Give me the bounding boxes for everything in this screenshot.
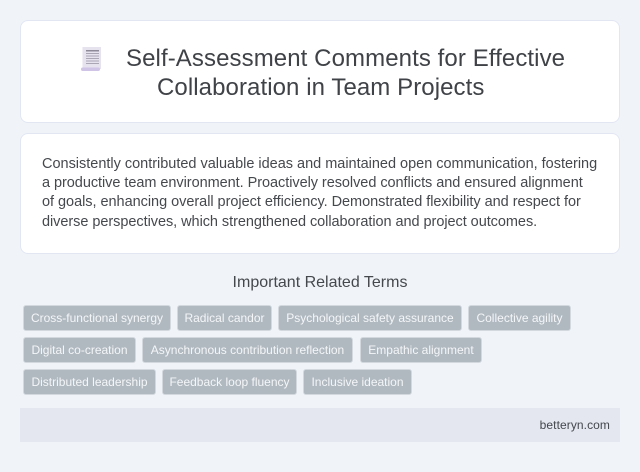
summary text bbox=[42, 156, 597, 230]
tag: Empathic alignment bbox=[368, 343, 474, 357]
footer source: betteryn.com bbox=[540, 418, 610, 432]
footer bar bbox=[20, 408, 620, 442]
tag list bbox=[23, 305, 571, 395]
tag bbox=[23, 369, 156, 395]
tag: Inclusive ideation bbox=[311, 375, 404, 389]
tag bbox=[303, 369, 412, 395]
tag: Feedback loop fluency bbox=[169, 375, 290, 389]
tag bbox=[278, 305, 462, 331]
tag: Radical candor bbox=[184, 311, 265, 325]
tag bbox=[23, 337, 136, 363]
summary text: Consistently contributed valuable ideas and maintained open communication, fostering bbox=[42, 156, 597, 172]
header panel bbox=[20, 20, 620, 123]
icon: document scroll bbox=[81, 47, 101, 71]
tag bbox=[142, 337, 353, 363]
tag: Collective agility bbox=[476, 311, 563, 325]
tag: Asynchronous contribution reflection bbox=[151, 343, 344, 357]
summary text: diverse perspectives, which strengthened collaboration and project outcomes. bbox=[42, 214, 537, 230]
tag bbox=[360, 337, 482, 363]
summary text: of goals, enhancing overall project efficiency. Demonstrated flexibility and respect for bbox=[42, 194, 581, 210]
tag bbox=[468, 305, 571, 331]
tag bbox=[162, 369, 297, 395]
tag bbox=[23, 305, 171, 331]
tag: Cross-functional synergy bbox=[31, 311, 163, 325]
tag: Digital co-creation bbox=[31, 343, 128, 357]
summary text: a productive team environment. Proactively resolved conflicts and ensured alignment bbox=[42, 175, 583, 191]
tag: Psychological safety assurance bbox=[286, 311, 454, 325]
section heading: Important Related Terms bbox=[233, 274, 407, 291]
title line 2: Collaboration in Team Projects bbox=[157, 74, 484, 101]
tag: Distributed leadership bbox=[31, 375, 148, 389]
title line 1: Self-Assessment Comments for Effective bbox=[126, 45, 565, 72]
tag bbox=[177, 305, 272, 331]
summary panel bbox=[20, 133, 620, 254]
